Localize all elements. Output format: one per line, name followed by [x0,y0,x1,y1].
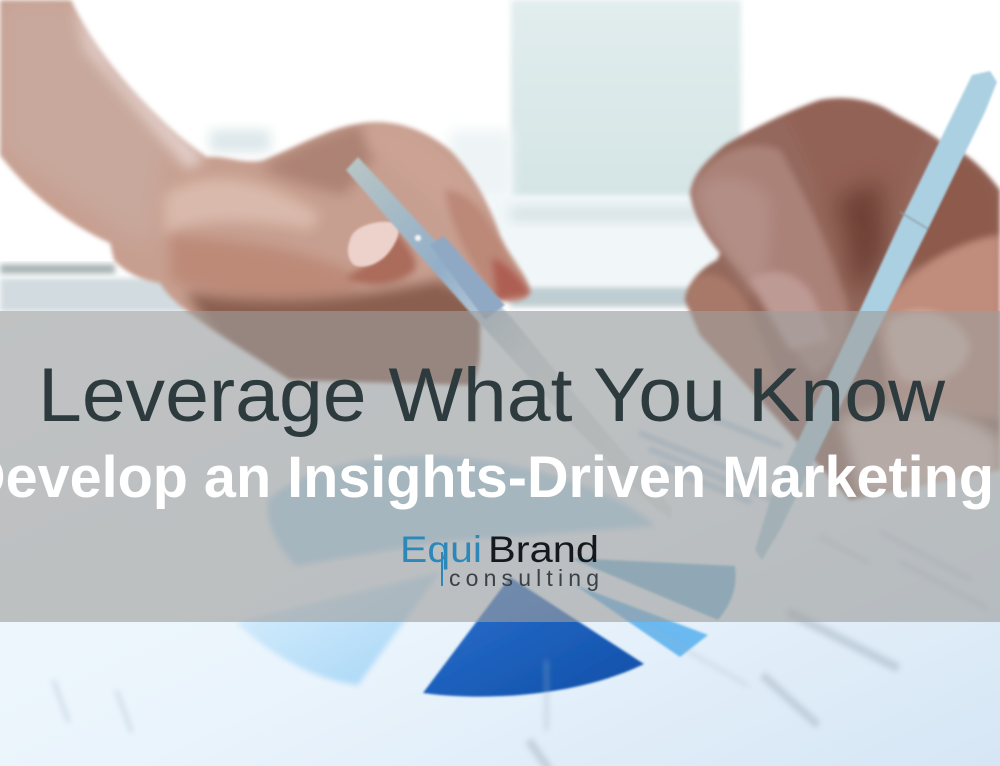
logo: EquiBrand consulting: Brand [488,529,599,570]
right hand [680,90,1000,510]
faint bar chart on paper [638,410,785,507]
right pen [755,71,997,560]
blurred paper labels [52,530,988,766]
left arm and hand [0,0,560,400]
teal right wedge [570,558,736,620]
heading: Leverage What You Know [38,353,946,438]
pie chart on paper [236,456,736,697]
fingernail [348,222,399,267]
translucent grey band [0,311,1000,622]
logo: EquiBrand consulting [400,529,599,591]
pale top wedge [267,456,655,566]
logo: EquiBrand consulting: consulting [449,565,599,591]
small bright wedge [575,585,708,657]
left pen [346,157,672,519]
pale left wedge [236,572,440,685]
logo: EquiBrand consulting: Equi [400,529,482,570]
dark blue wedge [423,577,644,697]
